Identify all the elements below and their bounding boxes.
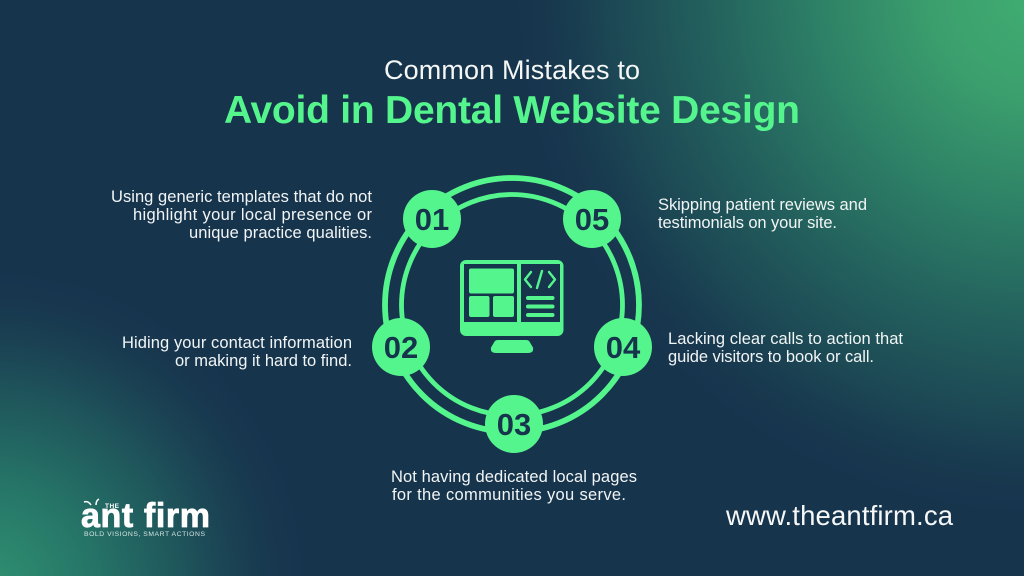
title line 1: Common Mistakes to — [384, 55, 640, 85]
title line 2: Avoid in Dental Website Design — [224, 89, 800, 132]
text: mistake 03: for the communities you serve. — [392, 486, 626, 504]
text: mistake 05: Skipping patient reviews and — [658, 196, 867, 214]
node 04 — [594, 318, 652, 376]
text: mistake 04: Lacking clear calls to action that — [668, 330, 903, 348]
node 03 — [485, 395, 543, 453]
node 05 — [563, 190, 621, 248]
text: mistake 05 — [658, 196, 867, 232]
title — [224, 55, 800, 132]
logo small word: THE — [105, 503, 120, 510]
node 04: 04 — [606, 330, 641, 365]
node 01: 01 — [415, 202, 449, 237]
text: mistake 03: Not having dedicated local pages — [391, 468, 637, 486]
text: mistake 02 — [122, 334, 352, 370]
node 03: 03 — [497, 407, 531, 442]
text: mistake 01: unique practice qualities. — [189, 224, 372, 242]
logo — [81, 497, 210, 538]
node 05: 05 — [575, 202, 609, 237]
node 02 — [372, 318, 430, 376]
logo tagline: BOLD VISIONS, SMART ACTIONS — [84, 531, 205, 538]
node 02: 02 — [384, 330, 418, 365]
text: mistake 05: testimonials on your site. — [658, 214, 837, 232]
logo mark: antennae — [84, 499, 99, 505]
text: mistake 04: guide visitors to book or call. — [668, 348, 874, 366]
website url: www.theantfirm.ca — [725, 500, 954, 531]
central icon: monitor with layout and code — [460, 260, 564, 353]
text: mistake 02: Hiding your contact information — [122, 334, 352, 352]
outer and inner rings — [385, 178, 639, 432]
text: mistake 01: highlight your local presence or — [133, 206, 372, 224]
text: mistake 04 — [668, 330, 903, 366]
text: mistake 01: Using generic templates that do not — [111, 188, 372, 206]
text: mistake 03 — [391, 468, 637, 504]
text: mistake 02: or making it hard to find. — [175, 352, 352, 370]
text: mistake 01 — [111, 188, 372, 242]
ring diagram — [372, 178, 652, 453]
node 01 — [403, 190, 461, 248]
logo wordmark: ant firm — [81, 497, 210, 535]
